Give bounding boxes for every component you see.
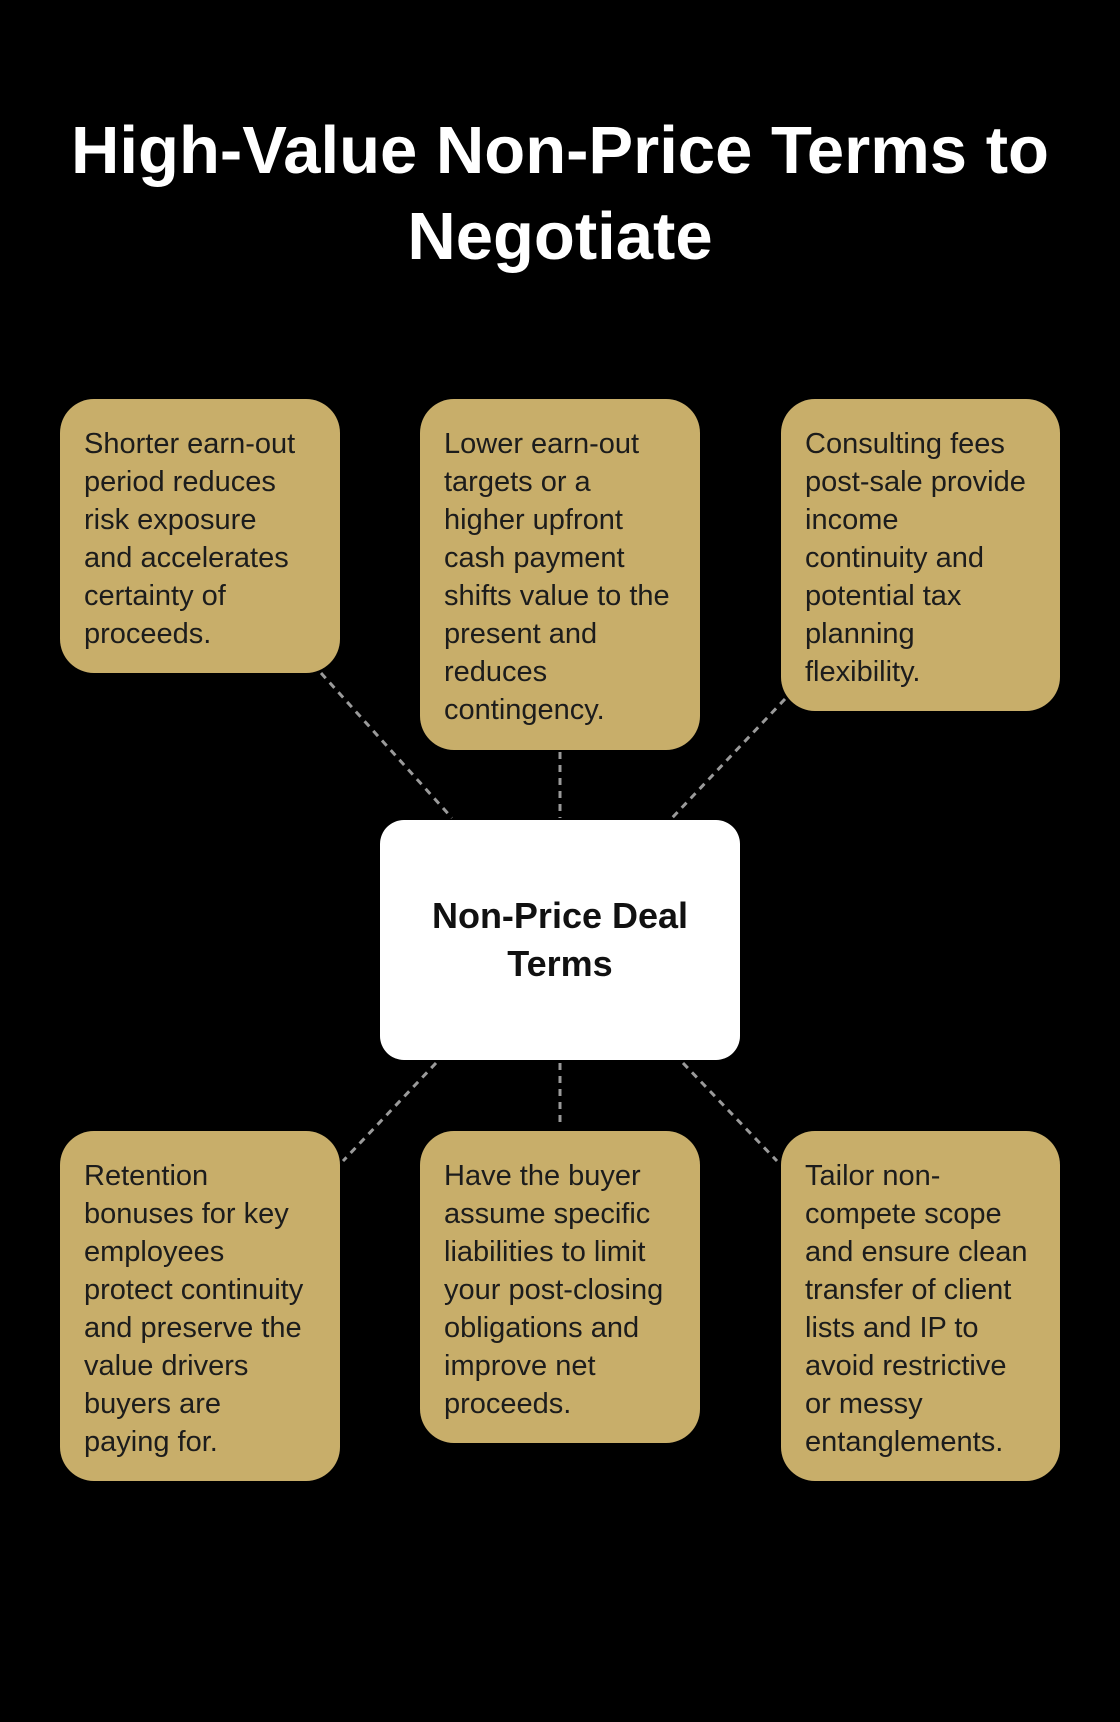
panel: non-compete: avoid restrictive (805, 1350, 1006, 1382)
panel: consulting fees: flexibility. (805, 656, 920, 688)
center node (380, 820, 740, 1060)
panel: consulting fees: post-sale provide (805, 466, 1026, 498)
panel: non-compete: and ensure clean (805, 1236, 1028, 1268)
panel: consulting fees: income (805, 504, 898, 536)
panel: lower earn-out targets: Lower earn-out (444, 428, 639, 460)
panel: buyer liabilities: Have the buyer (444, 1160, 641, 1192)
panel: lower earn-out targets: contingency. (444, 694, 605, 726)
panel: retention bonuses: paying for. (84, 1426, 218, 1458)
panel: shorter earn-out: proceeds. (84, 618, 211, 650)
panel: retention bonuses: Retention (84, 1160, 208, 1192)
center node: Terms (507, 943, 613, 984)
panel: lower earn-out targets: reduces (444, 656, 547, 688)
panel: retention bonuses: protect continuity (84, 1274, 303, 1306)
panel: consulting fees: Consulting fees (805, 428, 1005, 460)
panel: consulting fees (781, 399, 1060, 711)
panel: lower earn-out targets: targets or a (444, 466, 591, 498)
panel: non-compete (781, 1131, 1060, 1481)
panel: buyer liabilities (420, 1131, 700, 1443)
panel: consulting fees: planning (805, 618, 915, 650)
panel: non-compete: entanglements. (805, 1426, 1003, 1458)
panel: retention bonuses: employees (84, 1236, 224, 1268)
panel: shorter earn-out: period reduces (84, 466, 276, 498)
panel: buyer liabilities: your post-closing (444, 1274, 663, 1306)
panel: consulting fees: potential tax (805, 580, 961, 612)
panel: buyer liabilities: obligations and (444, 1312, 639, 1344)
panel: retention bonuses: value drivers (84, 1350, 248, 1382)
panel: lower earn-out targets: higher upfront (444, 504, 623, 536)
panel: shorter earn-out: certainty of (84, 580, 226, 612)
panel: shorter earn-out (60, 399, 340, 673)
panel: lower earn-out targets: cash payment (444, 542, 625, 574)
panel: shorter earn-out: Shorter earn-out (84, 428, 295, 460)
panel: non-compete: Tailor non- (805, 1160, 940, 1192)
panel: buyer liabilities: proceeds. (444, 1388, 571, 1420)
title (71, 113, 1049, 274)
panel: retention bonuses: buyers are (84, 1388, 221, 1420)
panel: retention bonuses: bonuses for key (84, 1198, 289, 1230)
panel: non-compete: compete scope (805, 1198, 1002, 1230)
panel: retention bonuses (60, 1131, 340, 1481)
title: Negotiate (407, 199, 713, 274)
panel: buyer liabilities: assume specific (444, 1198, 650, 1230)
title: High-Value Non-Price Terms to (71, 113, 1049, 188)
panel: consulting fees: continuity and (805, 542, 984, 574)
panel: shorter earn-out: and accelerates (84, 542, 289, 574)
panel: non-compete: transfer of client (805, 1274, 1011, 1306)
panel: lower earn-out targets: present and (444, 618, 597, 650)
panel: non-compete: lists and IP to (805, 1312, 979, 1344)
panel: retention bonuses: and preserve the (84, 1312, 302, 1344)
panel: buyer liabilities: liabilities to limit (444, 1236, 645, 1268)
panel: lower earn-out targets (420, 399, 700, 750)
panel: shorter earn-out: risk exposure (84, 504, 256, 536)
panel: non-compete: or messy (805, 1388, 923, 1420)
panel: lower earn-out targets: shifts value to the (444, 580, 670, 612)
center node: Non-Price Deal (432, 895, 688, 936)
panel: buyer liabilities: improve net (444, 1350, 596, 1382)
